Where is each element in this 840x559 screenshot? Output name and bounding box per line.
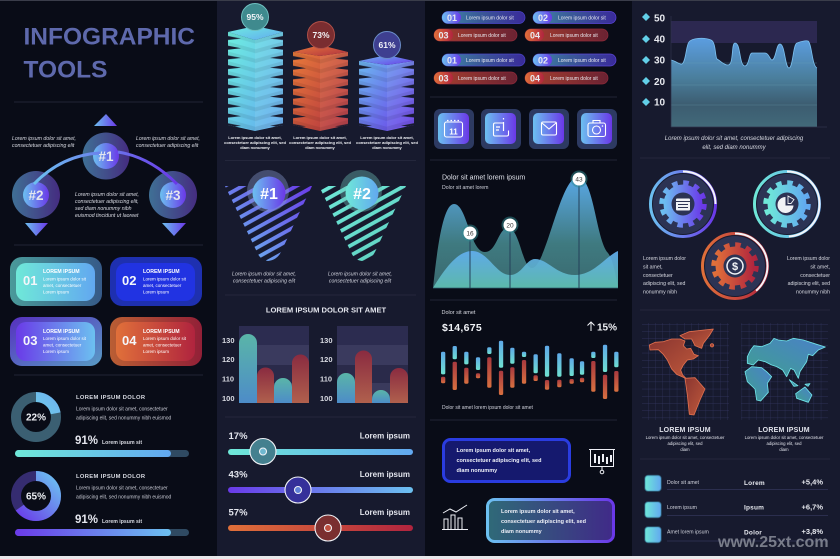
bar chart right: 110 [320, 374, 332, 384]
map caption right: diam [779, 447, 789, 452]
axis ticks and labels: 50 [654, 14, 666, 24]
card 04: amet, consectetuer [143, 342, 182, 348]
donut stat 22% [16, 397, 56, 437]
bar chart right: 130 [320, 336, 333, 345]
table row 1: Lorem [744, 480, 765, 487]
gear text left: Lorem ipsum dolor [643, 256, 686, 262]
caption centre: sed diam nonummy nibh [75, 206, 132, 212]
text block and progress 91%: LOREM IPSUM DOLOR [76, 395, 146, 401]
text block and progress 91% [15, 395, 189, 457]
striped funnel 2: #2 [353, 186, 371, 203]
area chart heading: Dolor sit amet lorem ipsum [442, 174, 525, 182]
card 01 [10, 257, 102, 306]
table row 2: +6,7% [802, 502, 823, 512]
table row 1: Dolor sit amet [667, 480, 700, 486]
bar chart left: 120 [222, 355, 235, 364]
table row 3: Dolor [744, 530, 762, 536]
gear: calendar [650, 172, 716, 236]
card 03: LOREM IPSUM [43, 329, 80, 335]
map caption right: Lorem ipsum dolor sit amet, consectetuer [745, 435, 824, 440]
line area chart top right [642, 13, 827, 127]
map caption right [745, 427, 824, 452]
icon: growth bars [442, 505, 468, 530]
icon: presentation board [589, 450, 615, 474]
text block and progress 91%: Lorem ipsum sit [102, 440, 142, 446]
map caption left: LOREM IPSUM [659, 427, 711, 434]
area chart heading [442, 174, 525, 191]
card 01: Lorem ipsum dolor sit [43, 276, 87, 282]
pill group two: Lorem ipsum dolor sit [558, 58, 606, 64]
title: INFOGRAPHIC [24, 24, 195, 50]
slider 57%: Lorem ipsum [360, 508, 410, 517]
gear: dollar [702, 234, 768, 298]
pill group one: Lorem ipsum dolor sit [558, 16, 606, 22]
pill group one: Lorem ipsum dolor sit [550, 33, 598, 39]
axis ticks and labels: 20 [654, 77, 666, 88]
card 04: Lorem ipsum dolor sit [143, 336, 187, 341]
callout box gradient [488, 500, 614, 542]
text block and progress 91% second: adipiscing elit, sed nonummy nibh euismod [76, 494, 172, 500]
bar chart right [320, 326, 408, 403]
node labels: #1 [98, 149, 114, 164]
map caption left: diam [680, 447, 690, 452]
funnel captions [232, 272, 392, 284]
funnel captions: consectetuer adipiscing elit [329, 278, 392, 284]
table row 2: Ipsum [744, 504, 764, 512]
stack captions: Lorem ipsum dolor sit amet, [228, 135, 282, 140]
table row 3: Amet lorem ipsum [667, 530, 709, 536]
card 02: Lorem ipsum dolor sit [143, 276, 187, 282]
arrow up [94, 114, 117, 126]
pill group two: 01 [447, 56, 457, 66]
stack captions: consectetuer adipiscing elit, sed [356, 140, 418, 145]
slider 43% [228, 470, 413, 503]
slider 57% [228, 508, 413, 541]
chart caption: elit, sed diam nonummy [702, 145, 767, 151]
card 03: amet, consectetuer [43, 342, 82, 348]
3D stack 95% [228, 4, 283, 131]
gear text right: Lorem ipsum dolor [787, 256, 830, 262]
chart caption [665, 136, 804, 151]
value header: Dolor sit amet [442, 310, 476, 316]
axis ticks and labels: 10 [654, 98, 666, 108]
gear text left: adipiscing elit, sed [643, 281, 686, 287]
marker 16 [462, 224, 478, 242]
text block and progress 91% second [15, 474, 189, 536]
card 04 [110, 317, 202, 366]
slider 43%: Lorem ipsum [360, 470, 410, 479]
pill group two: Lorem ipsum dolor sit [550, 76, 598, 82]
bar chart left [222, 326, 309, 403]
card 02: Lorem ipsum [143, 290, 169, 294]
stack captions: diam nonummy [240, 145, 271, 150]
pill group one [434, 12, 616, 41]
slider 17%: 17% [228, 431, 248, 442]
slider 43%: 43% [228, 470, 248, 480]
3D stack 73% [293, 22, 348, 131]
callout box blue: diam nonummy [456, 468, 498, 474]
callout box blue: consectetuer adipiscing elit, sed [456, 458, 541, 464]
pill group two: Lorem ipsum dolor sit [458, 76, 506, 82]
node 3 [149, 171, 197, 219]
caption left: Lorem ipsum dolor sit amet, [12, 136, 76, 142]
bar chart right: 120 [320, 355, 333, 364]
node 1 [82, 132, 130, 180]
marker 20: 20 [506, 222, 514, 230]
icon: camera [577, 109, 617, 149]
gear text right: nonummy nibh [796, 290, 830, 296]
gear text right: sit amet, [810, 264, 830, 270]
pill group one: 03 [438, 30, 449, 40]
pill group one: 01 [447, 13, 457, 23]
caption right [136, 136, 200, 149]
gear text right: adipiscing elit, sed [788, 281, 830, 287]
text block and progress 91% second: Lorem ipsum dolor sit amet, consectetuer [76, 486, 168, 492]
arrow down left [25, 223, 48, 236]
funnel captions: Lorem ipsum dolor sit amet, [232, 272, 296, 278]
gear: dollar: $ [732, 261, 738, 273]
chart footnote: Dolor sit amet lorem ipsum dolor sit amet [442, 405, 533, 411]
gear text right: consectetuer [800, 273, 830, 279]
stack captions: consectetuer adipiscing elit, sed [224, 140, 286, 145]
callout box gradient: consectetuer adipiscing elit, sed [501, 519, 586, 525]
callout box gradient: diam nonummy [501, 529, 543, 535]
callout box blue [444, 440, 570, 482]
text block and progress 91%: Lorem ipsum dolor sit amet, consectetuer [76, 406, 168, 412]
arrow down right [162, 223, 186, 236]
gear: pie chart [754, 172, 820, 236]
table row 3 [645, 527, 828, 542]
caption right: consectetuer adipiscing elit [136, 143, 199, 149]
donut stat 22%: 22% [26, 412, 46, 424]
funnel captions: consectetuer adipiscing elit [233, 278, 296, 284]
title [24, 24, 195, 84]
bar chart left: 130 [222, 336, 235, 345]
stack captions: Lorem ipsum dolor sit amet, [293, 135, 347, 140]
caption left [12, 136, 76, 149]
3D stack 95%: 95% [246, 12, 264, 22]
pill group one: Lorem ipsum dolor sit [466, 16, 514, 22]
card 03 [10, 317, 102, 366]
text block and progress 91%: 91% [75, 435, 98, 447]
stack captions: diam nonummy [305, 145, 336, 150]
callout box gradient: Lorem ipsum dolor sit amet, [501, 509, 575, 515]
area chart [433, 170, 618, 288]
stack captions: consectetuer adipiscing elit, sed [289, 140, 351, 145]
axis ticks and labels: 30 [654, 56, 666, 66]
title: TOOLS [24, 56, 107, 84]
pill group two: 04 [530, 74, 540, 84]
bar chart left: 110 [222, 374, 234, 384]
card 04: Lorem ipsum [143, 349, 169, 354]
marker 43: 43 [575, 176, 583, 184]
3D stack 73%: 73% [312, 30, 330, 40]
node labels: #2 [28, 188, 44, 203]
card 01: LOREM IPSUM [43, 269, 80, 275]
callout box blue: Lorem ipsum dolor sit amet, [456, 448, 531, 454]
stack captions: diam nonummy [372, 145, 403, 150]
gear text left: nonummy nibh [643, 290, 677, 296]
icon: calendar: 11 [449, 128, 458, 136]
axis ticks and labels: 40 [654, 34, 666, 46]
bar chart right: 100 [320, 394, 333, 403]
striped funnel 1: #1 [260, 186, 278, 203]
map caption left: Lorem ipsum dolor sit amet, consectetuer [646, 435, 725, 440]
card 03: Lorem ipsum [43, 349, 69, 354]
stack captions [224, 135, 418, 150]
caption centre: Lorem ipsum dolor sit amet, [75, 192, 139, 198]
icon: document info [481, 109, 521, 149]
table row 1 [645, 476, 828, 491]
pill group one: Lorem ipsum dolor sit [458, 33, 506, 39]
marker 16: 16 [466, 230, 474, 238]
gear text right [787, 256, 830, 296]
text block and progress 91% second: 91% [75, 514, 98, 526]
striped funnel 1 [225, 170, 312, 261]
caption right: Lorem ipsum dolor sit amet, [136, 136, 200, 142]
table row 2 [645, 502, 828, 518]
caption centre [75, 192, 139, 219]
card 04: LOREM IPSUM [143, 329, 180, 335]
diagram: three linked nodes [12, 114, 200, 236]
striped funnel 2 [319, 170, 406, 261]
node labels [28, 149, 181, 203]
watermark: www.25xt.com [717, 534, 829, 551]
pill group two [434, 54, 616, 84]
gear text left [643, 256, 686, 296]
card 01: Lorem ipsum [43, 290, 69, 294]
table row 2: Lorem ipsum [667, 505, 697, 511]
map: americas [642, 323, 729, 420]
text block and progress 91% second: Lorem ipsum sit [102, 519, 142, 525]
value header: 15% [597, 322, 617, 334]
stack captions: Lorem ipsum dolor sit amet, [360, 135, 414, 140]
caption left: consectetuer adipiscing elit [12, 143, 75, 149]
pill group two: Lorem ipsum dolor sit [466, 58, 514, 64]
connecting arc [34, 152, 177, 184]
card 04: 04 [122, 333, 137, 348]
chart caption: Lorem ipsum dolor sit amet, consectetuer adipiscing [665, 136, 804, 142]
caption centre: consectetuer adipiscing elit, [75, 199, 139, 205]
bar chart left: 100 [222, 394, 235, 403]
marker 20 [502, 216, 518, 234]
marker 43 [570, 170, 588, 188]
3D stack 61% [359, 32, 414, 131]
pill group two: 02 [538, 56, 548, 66]
map caption left [646, 427, 725, 452]
map caption right: LOREM IPSUM [758, 427, 810, 434]
pill group two: 03 [438, 74, 449, 84]
3D stack 61%: 61% [378, 40, 396, 50]
card 02: amet, consectetuer [143, 283, 182, 288]
card 01: amet, consectetuer [43, 283, 82, 288]
area chart heading: Dolor sit amet lorem [442, 185, 488, 191]
card 03: Lorem ipsum dolor sit [43, 336, 87, 341]
icon: envelope [529, 109, 569, 149]
card 02: 02 [122, 273, 136, 288]
pill group one: 02 [538, 13, 548, 23]
funnel captions: Lorem ipsum dolor sit amet, [328, 272, 392, 278]
donut stat 65%: 65% [26, 492, 46, 502]
node 2 [12, 171, 60, 219]
card 02: LOREM IPSUM [143, 269, 180, 275]
node labels: #3 [165, 188, 181, 203]
gear text left: consectetuer [643, 273, 673, 279]
caption centre: euismod tincidunt ut laoreet [75, 213, 139, 219]
value header: $14,675 [442, 322, 482, 334]
text block and progress 91% second: LOREM IPSUM DOLOR [76, 474, 146, 480]
donut stat 65% [16, 476, 56, 516]
map caption right: adipiscing elit, sed [766, 441, 802, 446]
map: world [741, 323, 828, 420]
card 01: 01 [23, 273, 37, 288]
axis ticks and labels [642, 13, 666, 108]
card 02 [110, 257, 202, 306]
text block and progress 91%: adipiscing elit, sed nonummy nibh euismod [76, 416, 172, 422]
icon: calendar [434, 109, 474, 149]
slider 57%: 57% [228, 508, 248, 518]
dual bar chart [441, 341, 618, 399]
slider 17%: Lorem ipsum [360, 432, 410, 440]
slider 17% [228, 431, 413, 464]
value header [442, 310, 617, 334]
map caption left: adipiscing elit, sed [667, 441, 703, 446]
table row 3: +3,8% [802, 527, 823, 536]
table row 1: +5,4% [802, 478, 823, 486]
pill group one: 04 [530, 30, 540, 40]
card 03: 03 [23, 333, 37, 348]
gear text left: sit amet, [643, 264, 663, 270]
chart heading: LOREM IPSUM DOLOR SIT AMET [266, 306, 387, 314]
